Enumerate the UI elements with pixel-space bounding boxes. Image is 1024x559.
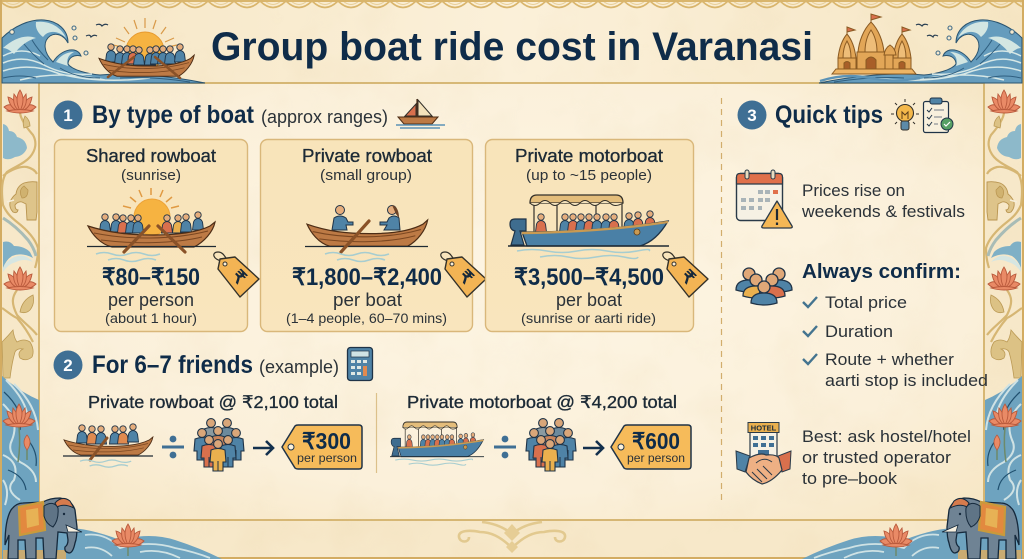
icon: price tag [214, 252, 259, 297]
icon: light bulb [891, 99, 919, 130]
illustration: private rowboat [305, 205, 428, 262]
divide sign [162, 436, 184, 458]
arrow [253, 441, 273, 455]
panel: private rowboat: per boat [333, 290, 402, 310]
panel: private motorboat: (up to ~15 people) [526, 167, 652, 184]
icon: price tag: ₹ [228, 266, 251, 289]
section 2 heading: (example) [259, 357, 339, 377]
panel: private rowboat: (small group) [320, 167, 412, 184]
section 1 heading: By type of boat [92, 101, 255, 129]
price tag: 300 per person [282, 425, 362, 469]
panel: private motorboat: Private motorboat [515, 146, 663, 166]
tip: prices rise: Prices rise on [802, 181, 905, 200]
tip: always confirm: Total price [825, 293, 907, 312]
panel: shared rowboat: ₹80–₹150 [102, 264, 200, 291]
icon: people group [736, 268, 792, 305]
divide sign [494, 436, 516, 458]
tip: always confirm: Duration [825, 322, 893, 341]
bottom-right river, lotus and elephant [802, 376, 1022, 559]
panel: private motorboat [486, 140, 708, 332]
section 3 heading: Quick tips [775, 101, 883, 129]
bottom centre ornament [459, 522, 565, 553]
divider [376, 393, 378, 473]
section 3 heading: 3 [747, 106, 757, 125]
price tag: 300 per person: ₹300 [302, 428, 351, 454]
icon: price tag: ₹ [677, 266, 700, 289]
section 2 heading: 2 [63, 356, 73, 375]
header boat with sunrise [99, 18, 194, 78]
example: private motorboat: Private motorboat @ ₹4,200 total [407, 392, 677, 412]
tip: book ahead: or trusted operator [802, 448, 951, 467]
illustration: small motorboat [390, 422, 484, 465]
panel: shared rowboat: Shared rowboat [86, 146, 216, 166]
panel: private rowboat: ₹1,800–₹2,400 [292, 264, 442, 291]
icon: hotel and handshake: HOTEL [751, 424, 777, 432]
panel: shared rowboat [54, 140, 259, 332]
column divider [720, 98, 722, 500]
illustration: small rowboat [63, 424, 153, 467]
section 1 heading: (approx ranges) [261, 107, 388, 127]
tip: book ahead [802, 427, 971, 488]
panel: private motorboat: (sunrise or aarti ride) [521, 310, 656, 326]
main content panel [39, 83, 984, 520]
section 1 heading [54, 100, 388, 130]
icon: price tag [663, 252, 708, 297]
temple illustration [832, 14, 916, 74]
arrow [583, 441, 603, 455]
icon: group of friends [194, 419, 244, 471]
price tag: 300 per person: per person [297, 453, 357, 465]
icon: price tag [441, 252, 486, 297]
section 1 heading: 1 [63, 106, 73, 125]
icon: group of friends [526, 419, 576, 471]
title: Group boat ride cost in Varanasi [211, 25, 813, 69]
tip: prices rise [801, 181, 965, 221]
icon: sailboat [396, 99, 445, 128]
icon: calculator [348, 348, 372, 380]
panel: private rowboat: (1–4 people, 60–70 mins) [286, 310, 447, 326]
section 2 heading: For 6–7 friends [92, 351, 253, 379]
panel: private motorboat: per boat [556, 290, 622, 310]
example: private motorboat [390, 392, 691, 471]
panel: private rowboat: Private rowboat [302, 146, 432, 166]
left ornamental border [2, 90, 38, 378]
panel: shared rowboat: (about 1 hour) [105, 310, 197, 326]
icon: hotel and handshake [736, 422, 791, 484]
panel: shared rowboat: per person [108, 290, 194, 310]
price tag: 600 per person: per person [627, 453, 685, 465]
illustration: shared rowboat at sunrise [87, 188, 216, 262]
panel: shared rowboat: (sunrise) [121, 167, 181, 184]
example: private rowboat [63, 392, 362, 471]
tip: book ahead: to pre–book [802, 469, 898, 488]
left header wave [2, 20, 205, 83]
temple water [820, 76, 920, 81]
section 3 heading [738, 100, 883, 130]
price tag: 600 per person [611, 425, 691, 469]
tip: always confirm [802, 261, 988, 390]
tip: always confirm: Route + whether [825, 350, 954, 369]
section 2 heading [54, 350, 339, 380]
panel: private rowboat [260, 140, 486, 332]
example: private rowboat: Private rowboat @ ₹2,100 total [88, 392, 338, 412]
panel: private motorboat: ₹3,500–₹4,500 [514, 264, 664, 291]
right header wave [819, 20, 1022, 83]
icon: price tag: ₹ [455, 266, 478, 289]
price tag: 600 per person: ₹600 [632, 428, 680, 454]
tip: always confirm: Always confirm: [802, 261, 961, 283]
tip: prices rise: weekends & festivals [801, 202, 965, 221]
right ornamental border [986, 90, 1022, 378]
icon: calendar with warning [736, 170, 792, 228]
tip: always confirm: aarti stop is included [825, 371, 988, 390]
header band [0, 0, 1024, 83]
icon: checklist clipboard [924, 98, 953, 132]
illustration: motorboat [508, 195, 669, 258]
tip: book ahead: Best: ask hostel/hotel [802, 427, 971, 446]
bottom-left river, lotus and elephant [2, 376, 222, 559]
